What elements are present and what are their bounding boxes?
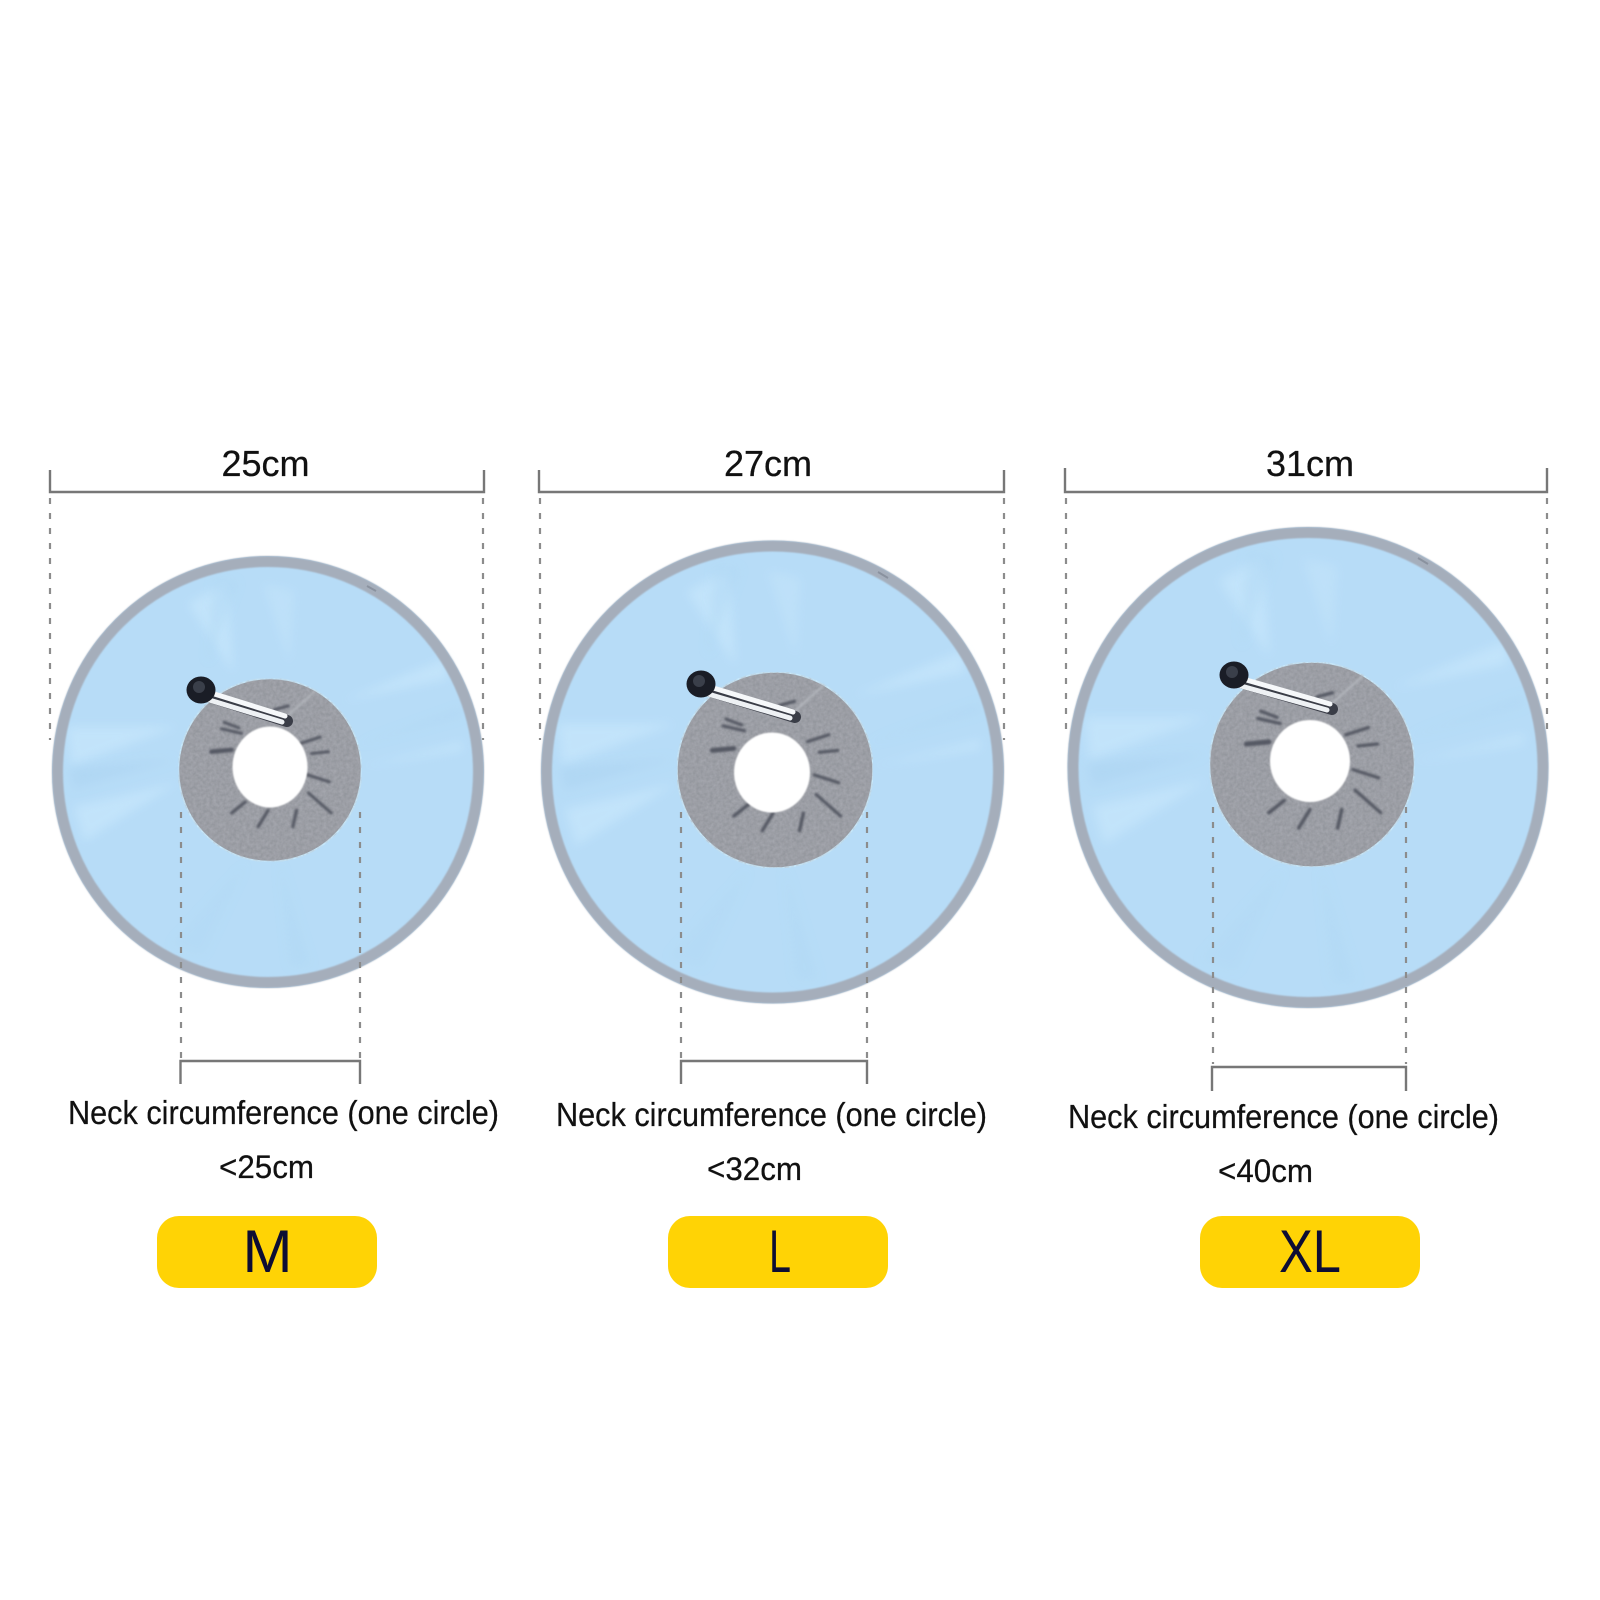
size badge M (157, 1216, 377, 1288)
neck value: <25cm (219, 1149, 314, 1185)
neck dimension (681, 812, 867, 1084)
size badge L: L (769, 1218, 791, 1285)
neck dimension (1212, 807, 1406, 1091)
width dimension: 27cm: 27cm (724, 443, 812, 484)
width dimension: 27cm (539, 443, 1004, 740)
collar L (541, 540, 1004, 1004)
icon: toggle and cord (1220, 662, 1332, 710)
icon: toggle and cord (686, 670, 795, 718)
collar XL (1068, 527, 1548, 1008)
width dimension: 31cm: 31cm (1266, 443, 1354, 484)
size badge XL (1200, 1216, 1420, 1288)
neck value: <40cm (1218, 1153, 1313, 1189)
size badge XL: XL (1279, 1218, 1341, 1285)
neck label: Neck circumference (one circle) (1068, 1098, 1499, 1135)
neck dimension (180, 812, 360, 1084)
size badge M: M (243, 1218, 292, 1285)
panel: size L (539, 443, 1004, 1288)
collar M (52, 556, 484, 988)
panel: size M (50, 443, 499, 1288)
width dimension: 25cm: 25cm (221, 443, 310, 484)
icon: toggle and cord (186, 676, 287, 722)
panel: size XL (1065, 443, 1548, 1288)
neck label: Neck circumference (one circle) (68, 1094, 499, 1131)
neck value: <32cm (707, 1151, 802, 1187)
width dimension: 25cm (50, 443, 484, 740)
width dimension: 31cm (1065, 443, 1547, 738)
neck label: Neck circumference (one circle) (556, 1096, 987, 1133)
size badge L (668, 1216, 888, 1288)
